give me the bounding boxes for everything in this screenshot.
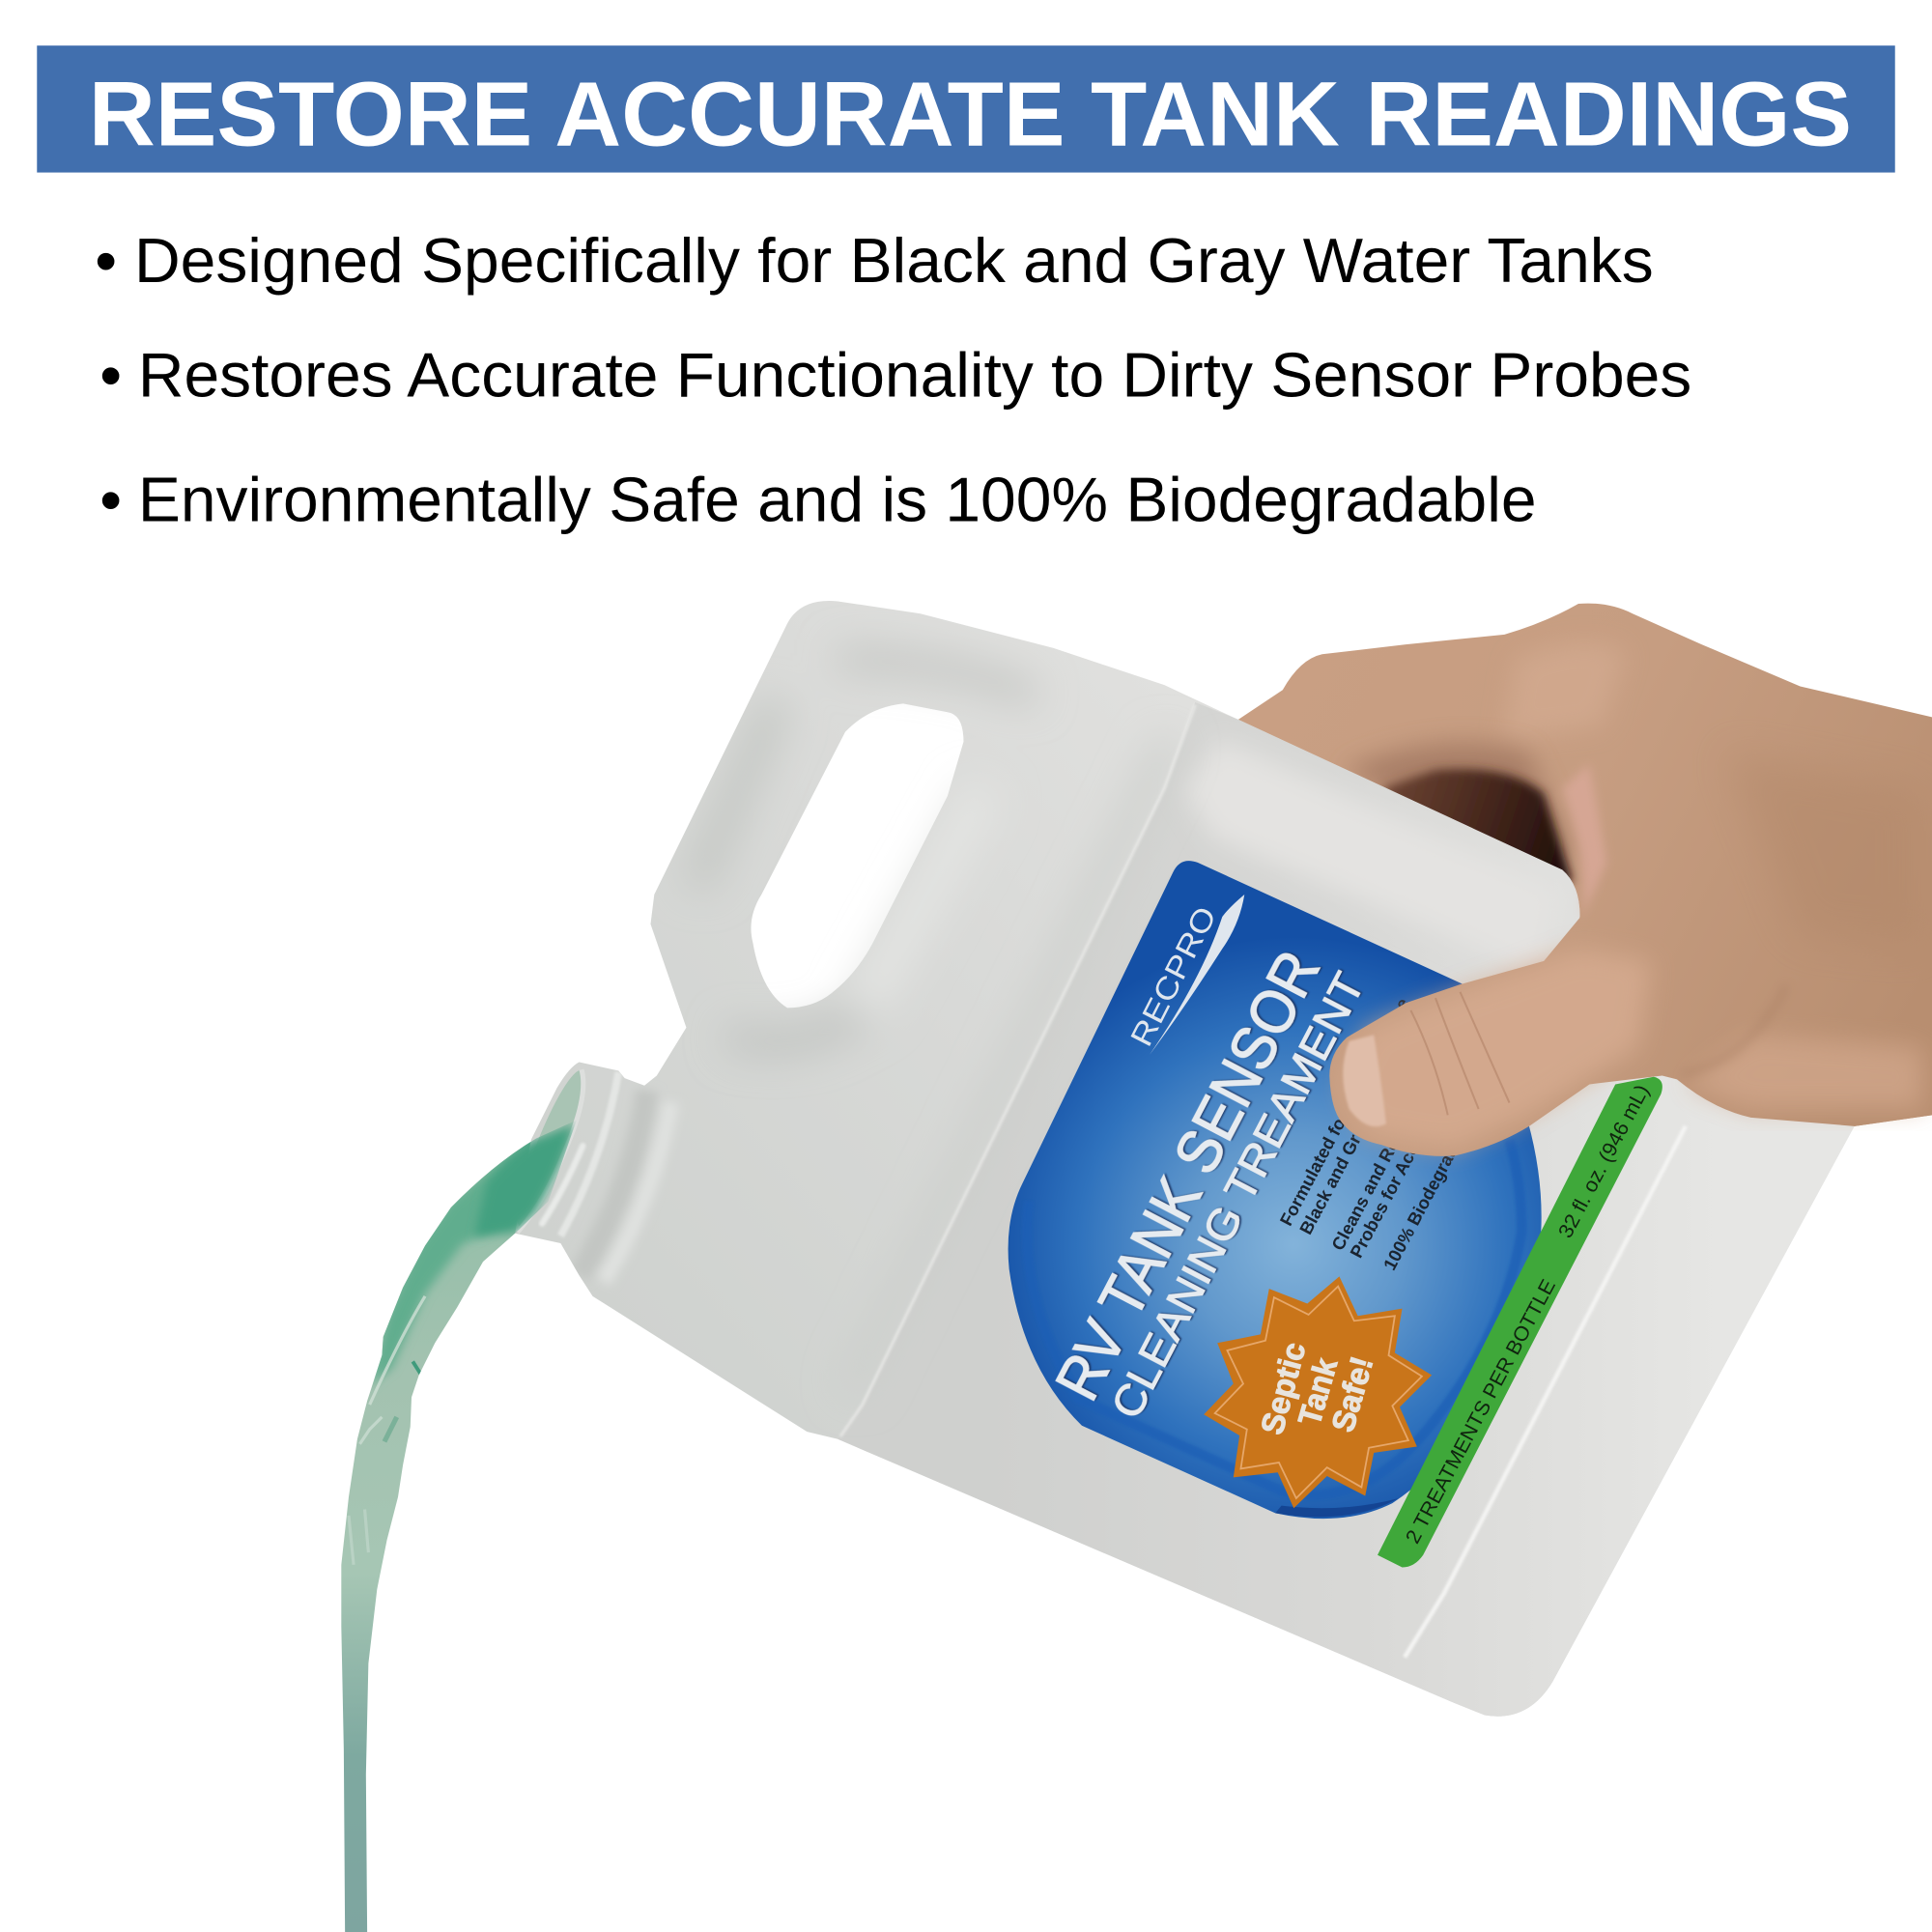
dark fold at label base: [1275, 1498, 1399, 1517]
treatments text: 2 TREATMENTS PER BOTTLE: [1402, 1276, 1560, 1548]
pouring liquid stream: [341, 1142, 531, 1932]
product name: RV TANK SENSOR: [1042, 940, 1333, 1411]
hand: thumb and palm in front: [1329, 739, 1932, 1156]
neck rings: [542, 1072, 671, 1282]
septic tank safe badge: Septic: [1255, 1339, 1314, 1438]
back of hand freckled tone: [1725, 752, 1922, 949]
bullet 1: •: [95, 225, 117, 296]
septic tank safe badge: [1204, 1276, 1432, 1508]
thumb wrinkles: [1410, 992, 1509, 1115]
main body panel: [838, 702, 1855, 1717]
hand: fingers behind the bottle: [1238, 604, 1932, 1126]
knuckle highlight: [1503, 642, 1627, 739]
palm crease: [1682, 985, 1786, 1074]
volume text: 32 fl. oz. (946 mL): [1554, 1081, 1654, 1242]
soft brown around finger gap: [1343, 743, 1577, 863]
brand logo: RECPRO: [1123, 901, 1223, 1052]
lower groove: [1405, 1126, 1686, 1658]
shadow between fingers and bottle: [1381, 769, 1573, 887]
bullet 3: Environmentally Safe and is 100% Biodegradable: [138, 465, 1537, 535]
bottle: [506, 601, 1855, 1717]
brand logo: [1123, 895, 1244, 1055]
liquid leaving the mouth: [474, 1123, 574, 1237]
product subtitle: CLEANING TREAMENT: [1102, 965, 1374, 1427]
label feature text: [1275, 995, 1479, 1273]
label feature text: 100% Biodegradable: [1379, 1110, 1479, 1273]
bullet 1: Designed Specifically for Black and Gray Water Tanks: [134, 225, 1654, 296]
lighter thumb tone: [1343, 949, 1651, 1149]
septic tank safe badge: Safe!: [1325, 1352, 1380, 1436]
title banner: [37, 45, 1895, 173]
septic tank safe badge: Tank: [1292, 1354, 1345, 1430]
product label: [1009, 861, 1542, 1519]
pink crease: [1562, 764, 1606, 918]
handle shading: [694, 644, 1159, 1056]
label feature text: Formulated for RV and Marine: [1275, 995, 1413, 1229]
bottle mouth: [506, 1065, 595, 1232]
upper shoulder highlight: [1190, 747, 1461, 920]
green volume strip: [1378, 1077, 1662, 1567]
title: RESTORE ACCURATE TANK READINGS: [89, 65, 1852, 166]
bottle silhouette with handle opening: [515, 601, 1855, 1717]
stream colour variations: [348, 1142, 531, 1565]
bullet 2: •: [99, 340, 122, 411]
label feature text: Cleans and Restores: [1327, 1088, 1428, 1254]
label inner ring: [1027, 1140, 1521, 1494]
lower palm tone: [1688, 1035, 1922, 1109]
bullet list: [95, 225, 1691, 535]
crease between shoulder and body: [840, 705, 1195, 1436]
label feature text: Probes for Accuracy: [1346, 1097, 1446, 1261]
bullet 2: Restores Accurate Functionality to Dirty Sensor Probes: [138, 340, 1691, 411]
bullet 3: •: [99, 465, 122, 535]
thumb nail: [1343, 1035, 1386, 1126]
label feature text: Black and Gray Tanks: [1295, 1065, 1400, 1237]
